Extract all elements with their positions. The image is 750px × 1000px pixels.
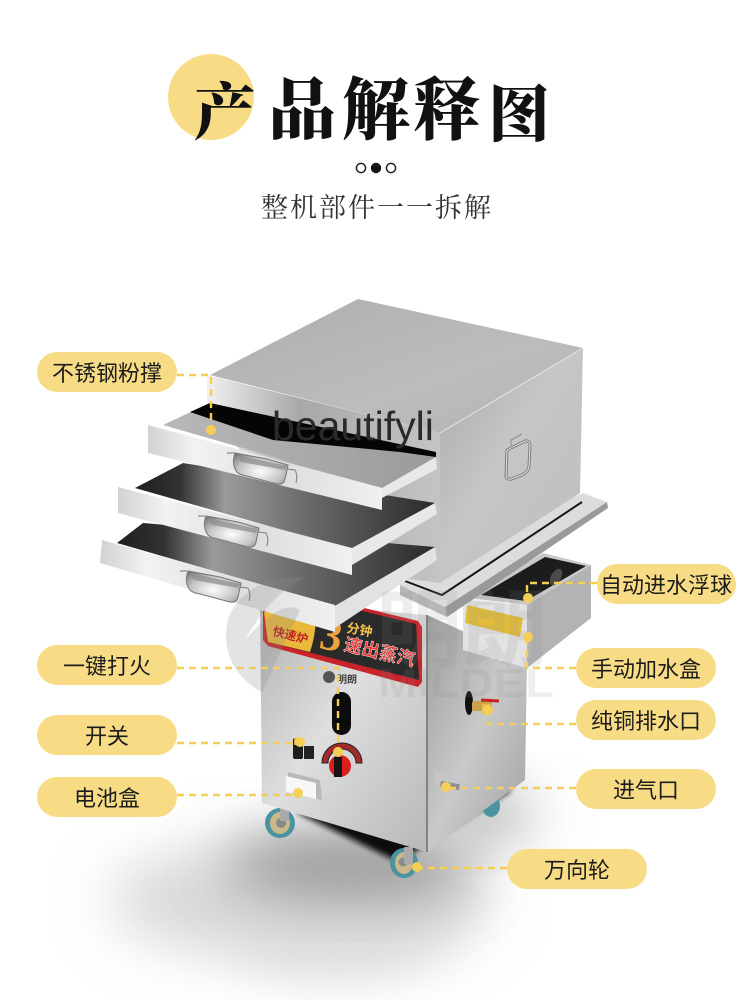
title text: 解 <box>342 73 410 149</box>
heading: title block <box>168 54 550 150</box>
red brand panel: 分钟 <box>345 620 374 639</box>
label: 纯铜排水口 <box>576 700 716 740</box>
drawer tray 2 <box>118 463 437 575</box>
title circle <box>168 54 254 140</box>
label: 一键打火: 一键打火 <box>63 654 151 679</box>
subtitle: 整机部件一一拆解 <box>261 193 493 223</box>
watermark brand: MILDEL <box>378 660 554 706</box>
label: 进气口: 进气口 <box>613 778 679 803</box>
title text: 释 <box>413 73 481 149</box>
red brand panel: 速出蒸汽 <box>342 634 417 670</box>
steamer box <box>207 299 583 583</box>
leader lines <box>177 375 597 868</box>
watermark text: beautifyli <box>272 403 434 449</box>
power switch <box>293 738 314 759</box>
title text: 图 <box>488 82 550 150</box>
steamer right face <box>440 348 583 583</box>
label: 电池盒: 电池盒 <box>74 786 140 811</box>
label: 进气口 <box>576 769 716 809</box>
red brand panel: 3 <box>316 610 346 662</box>
cabinet logo: 明朗 <box>337 673 357 686</box>
drawer tray 1 <box>148 403 437 510</box>
label: 开关: 开关 <box>85 724 129 749</box>
gas inlet <box>435 772 460 790</box>
steamer front face <box>207 375 440 583</box>
label: 自动进水浮球 <box>597 564 736 604</box>
decorative three dots <box>356 163 396 173</box>
cabinet right side <box>427 615 527 852</box>
product illustration: steamer <box>100 299 608 878</box>
brass drain valve <box>465 691 499 715</box>
wheels <box>265 795 500 878</box>
steamer top face <box>210 299 583 433</box>
watermark logo <box>226 577 305 692</box>
cabinet logo <box>323 671 357 686</box>
under-cabinet shadow <box>296 770 512 862</box>
label: 不锈钢粉撑 <box>37 352 177 392</box>
label: 自动进水浮球: 自动进水浮球 <box>600 573 732 598</box>
cabinet front <box>260 600 427 852</box>
sight window <box>332 692 351 735</box>
ignition knob <box>322 743 362 777</box>
label: 手动加水盒 <box>576 648 716 688</box>
label: 一键打火 <box>37 645 177 685</box>
drawer tray 3 <box>100 523 437 632</box>
red brand panel <box>263 606 422 687</box>
title text: 品 <box>268 73 336 149</box>
title text: 产 <box>194 79 256 148</box>
red brand panel: 快速炉 <box>271 623 310 647</box>
label: 开关 <box>37 715 177 755</box>
floor shadow <box>110 787 535 970</box>
label: 不锈钢粉撑: 不锈钢粉撑 <box>52 361 162 386</box>
base plate <box>400 493 608 617</box>
label: 万向轮: 万向轮 <box>544 858 610 883</box>
leader dots <box>206 425 533 872</box>
water box <box>463 553 591 668</box>
label: 电池盒 <box>37 777 177 817</box>
label: 纯铜排水口: 纯铜排水口 <box>591 709 701 734</box>
label: 万向轮 <box>507 849 647 889</box>
label: 手动加水盒: 手动加水盒 <box>591 657 701 682</box>
battery box <box>286 772 322 800</box>
watermark brand: 明朗 <box>376 583 548 679</box>
side handle <box>506 434 530 479</box>
